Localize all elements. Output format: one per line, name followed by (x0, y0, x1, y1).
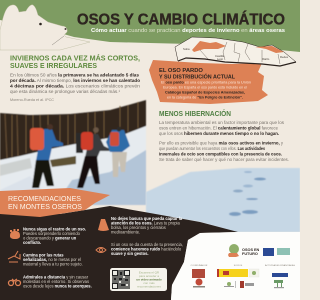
logo: Osos en Futuro (228, 244, 260, 257)
right text block: Por ello es previsible que haya más osos activos en invierno, y (159, 140, 284, 146)
recommendation: noise: Si un oso se da cuenta de tu presencia, (111, 242, 183, 247)
icon: bear head (0, 5, 90, 50)
recommendation: noise: suave y sin gestos. (111, 251, 149, 256)
logo: Osos en Futuro: OSOS EN (242, 248, 260, 252)
right text block: osos entren en hibernación. El calentamiento global favorece (159, 126, 279, 130)
map labels: Redes (280, 55, 289, 59)
dark recommendations panel (0, 206, 238, 300)
icon: binoculars (8, 279, 20, 286)
left text block: que esta dinámica se prolongue varias décadas más.¹ (10, 89, 120, 94)
recommendation: paths: Camina por las rutas (23, 252, 64, 258)
logo captions: COORDINADOR (191, 264, 208, 267)
recommendation: trail: Puedes sorprenderlo comiendo (23, 231, 81, 236)
logo: partner (277, 248, 290, 255)
bear distribution (192, 41, 284, 53)
orange panel text: El oso pardo es una especie prioritaria para la Unión (161, 80, 251, 84)
map southern edge (178, 58, 296, 66)
recommendation: rubbish: No dejes basura que pueda captar la (111, 216, 183, 221)
subtitle: Cómo actuar cuando se practican deportes de invierno en áreas oseras (91, 28, 285, 34)
right text block: que puedan aumentar los encuentros con ellos. Las actividades (159, 146, 272, 151)
logo captions: SOCIOS (234, 265, 243, 267)
QR caption: Escanea el QR (139, 270, 160, 274)
logo: trees (274, 280, 284, 288)
map of Cantabrian range (175, 37, 296, 66)
left text block: En los últimos 50 años la primavera se ha adelantado 5 días (10, 72, 138, 78)
map labels: Castilla (215, 54, 225, 58)
hiker 3 (106, 127, 130, 177)
orange brush panel (149, 60, 268, 104)
snow footprints panel (146, 168, 300, 232)
source note: Moreno-Rueda et al. IPCC (10, 98, 55, 102)
title: OSOS Y CAMBIO CLIMÁTICO (77, 12, 285, 28)
orange panel text: en la categoría de “En Peligro de Extinción”. (167, 96, 245, 100)
recommendation: distance: osos desde lejos nunca te acerques. (23, 284, 92, 288)
recommendation: trail: o descansando y generar un (23, 236, 76, 240)
left heading: INVIERNOS CADA VEZ MÁS CORTOS, (10, 54, 140, 62)
map labels: Riaño (262, 57, 270, 61)
map labels: Soba (183, 47, 190, 51)
photo: hikers in snow (0, 100, 146, 205)
recommendation: rubbish: bolsa, los precintos y ciérralos (111, 225, 166, 230)
recommendation: trail: Nunca sigas el rastro de un oso. (23, 226, 86, 232)
logo captions: ACTIVIDADES FINANCIADAS (265, 264, 295, 267)
green header band (0, 0, 300, 52)
forest background (0, 100, 146, 160)
QR caption: un vídeo animado (136, 278, 162, 282)
orange panel heading: Y SU DISTRIBUCIÓN ACTUAL (159, 72, 235, 80)
right text block: que los osos hibernen durante menos tiempo o no lo hagan. (159, 131, 286, 136)
right text block: Se trata de saber qué hacer y qué no hacer para evitar incidentes. (159, 157, 289, 162)
left heading: SUAVES E IRREGULARES (10, 61, 97, 70)
icon: paw (10, 229, 20, 239)
logo: Osos en Futuro: FUTURO (242, 252, 258, 256)
logo: ministry blue (272, 273, 288, 277)
orange recommendations banner (0, 188, 110, 217)
icon: rubbish bag (98, 219, 109, 231)
right text block: invernales de ocio son compatibles con la presencia de osos. (159, 152, 282, 156)
orange panel heading: EL OSO PARDO (159, 68, 203, 74)
logo: Spanish government (217, 269, 259, 277)
white logo area (171, 232, 300, 300)
QR code (112, 270, 130, 289)
icon: eye (96, 248, 106, 252)
recommendation: trail: conflicto. (23, 240, 41, 245)
recommendation: noise: comience hacemos ruido haciéndolo (111, 246, 181, 252)
icon: map route (8, 251, 20, 262)
QR caption: recomendaciones (137, 284, 161, 288)
logo: regional partners (224, 281, 254, 288)
logo: EU flag (263, 248, 274, 256)
QR caption: para acceder a (139, 274, 159, 278)
right text block: La temperatura ambiental es un factor importante para que los (159, 120, 285, 125)
orange panel text: Europea. En España el oso pardo está incluido en el (163, 86, 247, 90)
snow shadows (55, 150, 146, 205)
recommendations heading: RECOMENDACIONES (8, 196, 81, 203)
left text block: por década. Al mismo tiempo, los inviernos se han calentado (10, 78, 140, 83)
left text block: 4 décimas por década. Los escenarios climáticos prevén (10, 84, 133, 88)
orange panel text: Catálogo Español de Especies Amenazadas, (165, 90, 245, 94)
right heading: MENOS HIBERNACIÓN (159, 109, 231, 118)
recommendation: paths: señalizadas, no te metas por el (23, 257, 81, 262)
recommendation: distance: molestias en el entorno. Si observas (23, 279, 89, 284)
hiker 1 (30, 124, 63, 188)
recommendation: distance: Admírales a distancia y sin causar (23, 274, 88, 280)
map labels: León (217, 57, 224, 61)
QR card (110, 268, 167, 291)
recommendation: rubbish: medioambiente. (111, 230, 140, 234)
logo: coordinator (192, 269, 205, 288)
recommendation: paths: matorral y lleva a tu perro sujeto. (23, 262, 83, 266)
recommendation: rubbish: atención de los osos. Lava tu propia (111, 220, 180, 226)
recommendations heading: EN MONTES OSEROS (8, 204, 82, 211)
QR caption: con más (143, 281, 155, 285)
hiker 2 (76, 127, 110, 188)
